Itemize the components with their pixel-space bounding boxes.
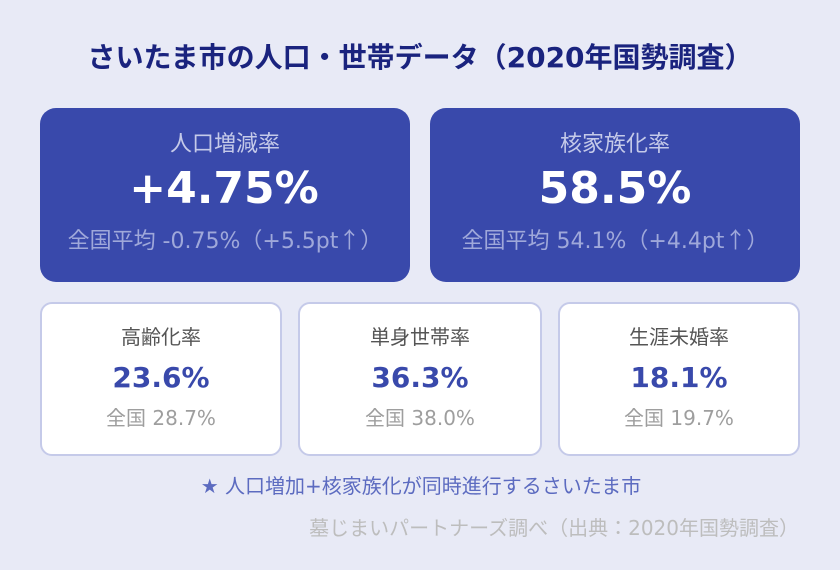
value: nuclear family: 58.5% xyxy=(539,163,691,214)
panel: aging rate xyxy=(40,302,282,456)
label: nuclear family: 核家族化率 xyxy=(560,132,670,157)
comparison: national lifetime unmarried: 全国 19.7% xyxy=(624,406,734,430)
value: lifetime unmarried: 18.1% xyxy=(630,361,728,394)
callout: ★ 人口増加+核家族化が同時進行するさいたま市 xyxy=(201,474,641,498)
source note: 墓じまいパートナーズ調べ（出典：2020年国勢調査） xyxy=(309,516,799,540)
panel: population change rate xyxy=(40,108,410,282)
label: aging rate: 高齢化率 xyxy=(121,325,201,349)
comparison: national population change: 全国平均 -0.75%（+5.5pt↑） xyxy=(68,223,382,255)
label: single household: 単身世帯率 xyxy=(370,325,470,349)
panel: lifetime unmarried rate xyxy=(558,302,800,456)
title: さいたま市の人口・世帯データ（2020年国勢調査） xyxy=(87,41,753,74)
panel: single household rate xyxy=(298,302,542,456)
value: population change: +4.75% xyxy=(129,163,319,214)
comparison: national single household: 全国 38.0% xyxy=(365,406,475,430)
value: aging rate: 23.6% xyxy=(112,361,210,394)
label: population change: 人口増減率 xyxy=(170,132,280,157)
value: single household: 36.3% xyxy=(371,361,469,394)
comparison: national nuclear family: 全国平均 54.1%（+4.4pt↑） xyxy=(462,223,768,255)
panel: nuclear family rate xyxy=(430,108,800,282)
comparison: national aging rate: 全国 28.7% xyxy=(106,406,216,430)
label: lifetime unmarried: 生涯未婚率 xyxy=(629,325,729,349)
